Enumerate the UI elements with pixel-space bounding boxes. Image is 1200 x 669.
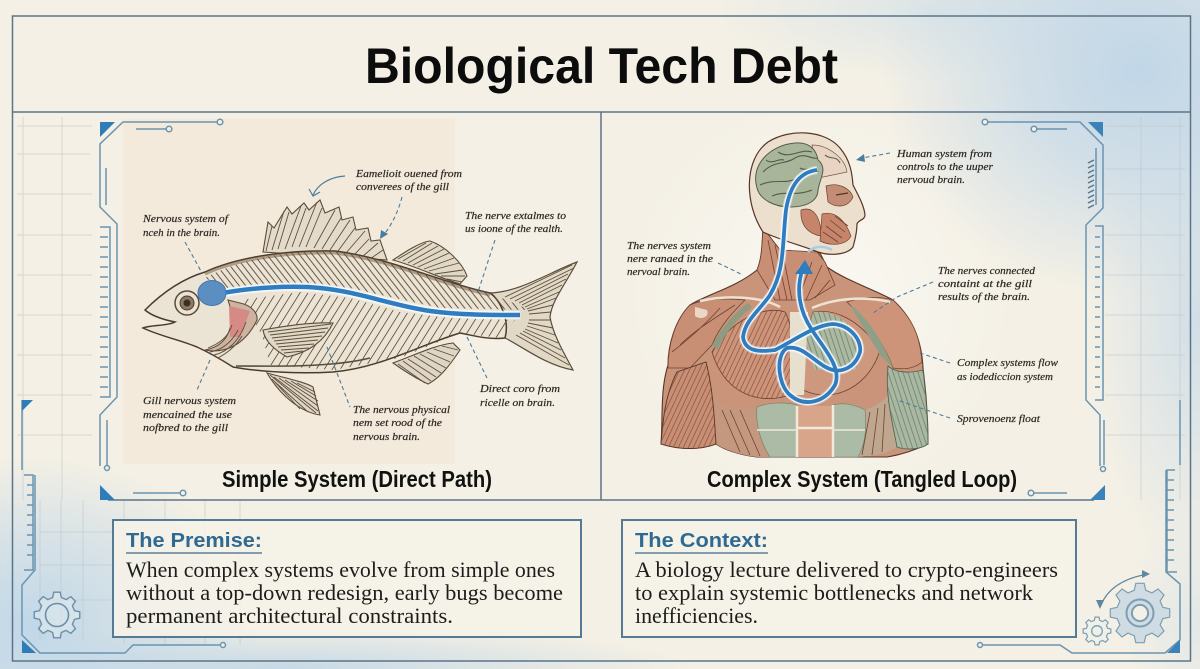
human annotation: upper brain: controls to the uuper bbox=[897, 162, 994, 173]
context body text bbox=[635, 557, 1058, 628]
panel: the premise bbox=[113, 520, 581, 637]
context body text: to explain systemic bottlenecks and network bbox=[635, 580, 1033, 605]
fish dorsal shading bbox=[205, 253, 490, 295]
human annotation: connected: containt at the gill bbox=[938, 279, 1032, 290]
human annotation: upper brain: nervoud brain. bbox=[897, 175, 965, 186]
fish annotation: direct bbox=[467, 337, 560, 409]
HUD frame: lower left corner with ruler bbox=[22, 400, 226, 653]
HUD frame: left of illustrations bbox=[100, 119, 223, 500]
HUD frame: lower right corner with ruler bbox=[978, 400, 1180, 653]
human annotation: ranged: nere ranaed in the bbox=[627, 254, 713, 265]
human chest muscles bbox=[712, 310, 880, 399]
human right shoulder and arm bbox=[847, 297, 928, 449]
premise body text: permanent architectural constraints. bbox=[126, 603, 453, 628]
human annotation: connected bbox=[873, 266, 1036, 313]
fish annotation: direct: ricelle on brain. bbox=[480, 398, 555, 409]
panel: the context bbox=[622, 520, 1076, 637]
human ribcage side muscles bbox=[716, 395, 897, 457]
fish belly line bbox=[236, 358, 370, 366]
fish annotation: nerve extends bbox=[465, 211, 566, 292]
context body text: inefficiencies. bbox=[635, 603, 758, 628]
human annotation: connected: results of the brain. bbox=[938, 292, 1030, 303]
premise body text: without a top-down redesign, early bugs become bbox=[126, 580, 563, 605]
fish annotation: physical bbox=[327, 347, 450, 443]
human head bbox=[749, 133, 865, 254]
context heading: The Context: bbox=[635, 529, 768, 552]
fish body bbox=[143, 251, 506, 373]
fish gill bbox=[205, 300, 257, 358]
fish annotation: gill: mencained the use bbox=[143, 410, 232, 421]
title: Biological Tech Debt bbox=[365, 38, 838, 94]
human annotation: upper brain bbox=[856, 149, 994, 186]
fish illustration bbox=[143, 200, 577, 415]
premise body text: When complex systems evolve from simple ones bbox=[126, 557, 555, 582]
fish tail bbox=[490, 262, 577, 370]
fish annotation: physical: nem set rood of the bbox=[353, 418, 442, 429]
caption: complex system: Complex System (Tangled Loop) bbox=[707, 466, 1017, 492]
context body text: A biology lecture delivered to crypto-engineers bbox=[635, 557, 1058, 582]
fish illustration paper bbox=[123, 119, 455, 464]
human annotation: complex flow: Complex systems flow bbox=[957, 358, 1058, 369]
fish pectoral fin bbox=[263, 323, 333, 357]
human annotation: complex flow bbox=[920, 353, 1058, 383]
premise body text bbox=[126, 557, 563, 628]
fish annotation: gill: nofbred to the gill bbox=[143, 423, 228, 434]
fish lower fins bbox=[267, 343, 460, 415]
HUD frame: right of illustrations bbox=[982, 119, 1106, 500]
human annotation: connected: The nerves connected bbox=[938, 266, 1036, 277]
fish dorsal fins bbox=[263, 200, 467, 284]
fish annotation: physical: nervous brain. bbox=[353, 432, 420, 443]
fish annotation: top: converees of the gill bbox=[356, 182, 449, 193]
icon: gears with cycle arrow right bbox=[1083, 570, 1170, 645]
blueprint grid left bbox=[17, 117, 240, 645]
fish annotation: direct: Direct coro from bbox=[479, 384, 560, 395]
human annotation: ranged bbox=[627, 241, 743, 278]
fish ribs bbox=[206, 251, 526, 370]
fish annotation: gill: Gill nervous system bbox=[143, 396, 236, 407]
human torso and arms bbox=[661, 228, 928, 457]
fish annotation: gill bbox=[143, 360, 236, 434]
human annotation: ranged: nervoal brain. bbox=[627, 267, 690, 278]
fish annotation: nervous system: Nervous system of bbox=[142, 214, 230, 225]
human nerve: tangled loop bbox=[743, 170, 860, 402]
human annotation: float bbox=[897, 400, 1041, 425]
fish nerve: direct path bbox=[198, 280, 520, 315]
fish annotation: top: Eamelioit ouened from bbox=[355, 169, 462, 180]
human abdomen bbox=[757, 403, 866, 457]
caption: simple system: Simple System (Direct Path) bbox=[222, 466, 492, 492]
human clavicles and neck bbox=[700, 228, 890, 308]
blueprint grid right bbox=[1105, 117, 1185, 500]
icon: gear left bbox=[34, 592, 80, 638]
fish annotation: physical: The nervous physical bbox=[353, 405, 450, 416]
human annotation: ranged: The nerves system bbox=[627, 241, 711, 252]
fish annotation: nerve extends: The nerve extalmes to bbox=[465, 211, 566, 222]
human annotation: float: Sprovenoenz float bbox=[957, 414, 1041, 425]
premise heading: The Premise: bbox=[126, 529, 262, 552]
human left shoulder and arm bbox=[661, 299, 752, 448]
fish annotation: nerve extends: us ioone of the realth. bbox=[465, 224, 563, 235]
human illustration bbox=[661, 133, 928, 457]
human annotation: upper brain: Human system from bbox=[896, 149, 992, 160]
fish annotation: nervous system: nceh in the brain. bbox=[143, 228, 220, 239]
fish annotation: top bbox=[309, 169, 462, 239]
human annotation: complex flow: as iodediccion system bbox=[957, 372, 1053, 383]
fish eye bbox=[175, 291, 199, 315]
fish annotation: nervous system bbox=[142, 214, 230, 273]
